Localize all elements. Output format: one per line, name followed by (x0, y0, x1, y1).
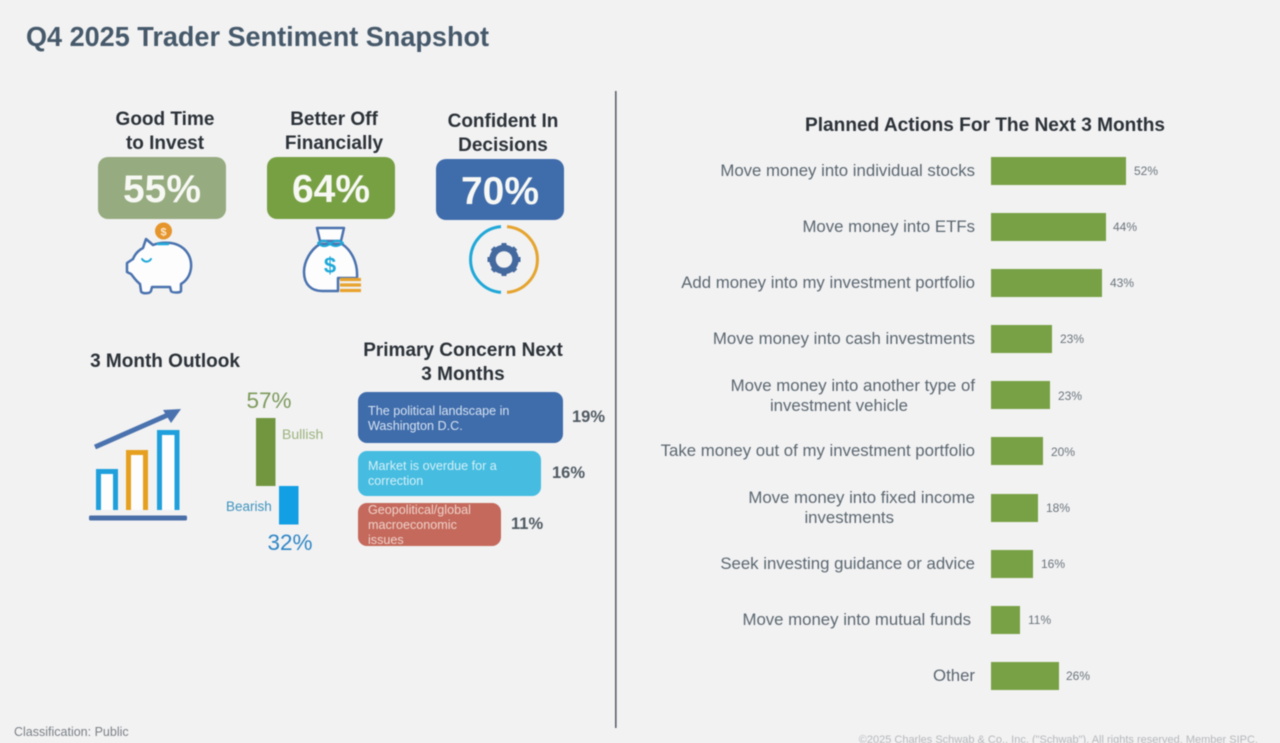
concern: political landscape: 19% (572, 408, 605, 426)
row: take money out: 20% (1051, 445, 1075, 459)
row: ETFs (802, 213, 1137, 241)
concern: market correction: Market is overdue for a (368, 459, 497, 473)
heading: primary concern next 3 months: 3 Months (421, 364, 505, 385)
chart heading: Planned Actions For The Next 3 Months (805, 114, 1165, 136)
concern: political landscape (358, 392, 605, 443)
bearish label: Bearish (226, 499, 272, 514)
row: another vehicle: Move money into another type of (731, 376, 975, 395)
stat box: 64% (267, 157, 395, 219)
icon: money bag: $ (324, 253, 336, 278)
row: cash investments: Move money into cash investments (713, 329, 975, 348)
heading: 3 month outlook: 3 Month Outlook (90, 351, 240, 372)
panel: better off financially (267, 109, 395, 291)
stat box: 55% (98, 157, 226, 219)
concern: geopolitical issues: macroeconomic (368, 518, 457, 532)
row: fixed income (748, 488, 1070, 527)
row: take money out (661, 437, 1075, 465)
panel: good time to invest (98, 109, 226, 293)
row: individual stocks: Move money into individual stocks (720, 161, 975, 180)
panel: primary concern (358, 340, 605, 547)
row: guidance: Seek investing guidance or advice (720, 554, 975, 573)
row: add money: Add money into my investment portfolio (681, 273, 975, 292)
row: other (933, 662, 1090, 690)
row: guidance (720, 550, 1065, 578)
concern: market correction (358, 451, 585, 496)
row: fixed income: investments (804, 508, 894, 527)
row: take money out: Take money out of my investment portfolio (661, 441, 975, 460)
row: mutual funds: 11% (1028, 613, 1051, 627)
icon: gear in ring (471, 227, 537, 292)
icon: piggy bank: $ (160, 226, 167, 238)
bearish value: 32% (267, 530, 313, 555)
heading: good time to invest: to Invest (126, 133, 205, 154)
row: fixed income: Move money into fixed income (748, 488, 975, 507)
concern: geopolitical issues: Geopolitical/global (368, 503, 471, 517)
concern: political landscape: The political landscape in (368, 404, 509, 418)
panel: planned actions chart (661, 114, 1165, 690)
row: individual stocks (720, 157, 1158, 185)
row: guidance: 16% (1041, 557, 1065, 571)
concern: geopolitical issues: 11% (511, 515, 543, 533)
row: add money (681, 269, 1134, 297)
row: add money: 43% (1110, 276, 1134, 290)
title: Q4 2025 Trader Sentiment Snapshot (26, 21, 489, 52)
bullish value: 57% (246, 388, 292, 413)
row: ETFs: Move money into ETFs (802, 217, 975, 236)
row: cash investments (713, 325, 1084, 353)
row: cash investments: 23% (1060, 332, 1084, 346)
row: another vehicle: 23% (1058, 389, 1082, 403)
icon: piggy bank (127, 222, 191, 293)
icon: rising bar chart (89, 409, 187, 520)
row: ETFs: 44% (1113, 220, 1137, 234)
footer: classification: Classification: Public (14, 725, 129, 739)
diverging chart: bullish vs bearish (226, 388, 323, 555)
concern: geopolitical issues (358, 503, 543, 547)
panel: confident in decisions (436, 111, 564, 292)
row: other: Other (933, 666, 975, 685)
row: individual stocks: 52% (1134, 164, 1158, 178)
heading: confident in decisions: Decisions (458, 135, 548, 156)
row: mutual funds (742, 606, 1051, 634)
heading: better off financially: Financially (285, 133, 384, 154)
row: another vehicle: investment vehicle (770, 396, 908, 415)
stat box: 70%: 70% (461, 170, 539, 213)
heading: primary concern next 3 months: Primary Concern Next (363, 340, 563, 361)
concern: geopolitical issues: issues (368, 533, 404, 547)
icon: money bag (304, 228, 361, 291)
bullish bar (256, 418, 276, 486)
stat box: 70% (436, 159, 564, 220)
bullish label: Bullish (282, 426, 323, 442)
row: mutual funds: Move money into mutual funds (742, 610, 971, 629)
bearish bar (279, 486, 298, 524)
heading: better off financially: Better Off (290, 109, 378, 130)
concern: market correction: correction (368, 474, 423, 488)
row: other: 26% (1066, 669, 1090, 683)
panel: 3 month outlook (89, 351, 323, 555)
stat box: 64%: 64% (292, 168, 370, 211)
heading: good time to invest: Good Time (116, 109, 214, 130)
concern: political landscape: Washington D.C. (368, 419, 463, 433)
stat box: 55%: 55% (123, 168, 201, 211)
row: fixed income: 18% (1046, 501, 1070, 515)
heading: confident in decisions: Confident In (448, 111, 558, 132)
row: another vehicle (731, 376, 1082, 415)
panel divider (615, 91, 617, 728)
concern: market correction: 16% (552, 464, 585, 482)
